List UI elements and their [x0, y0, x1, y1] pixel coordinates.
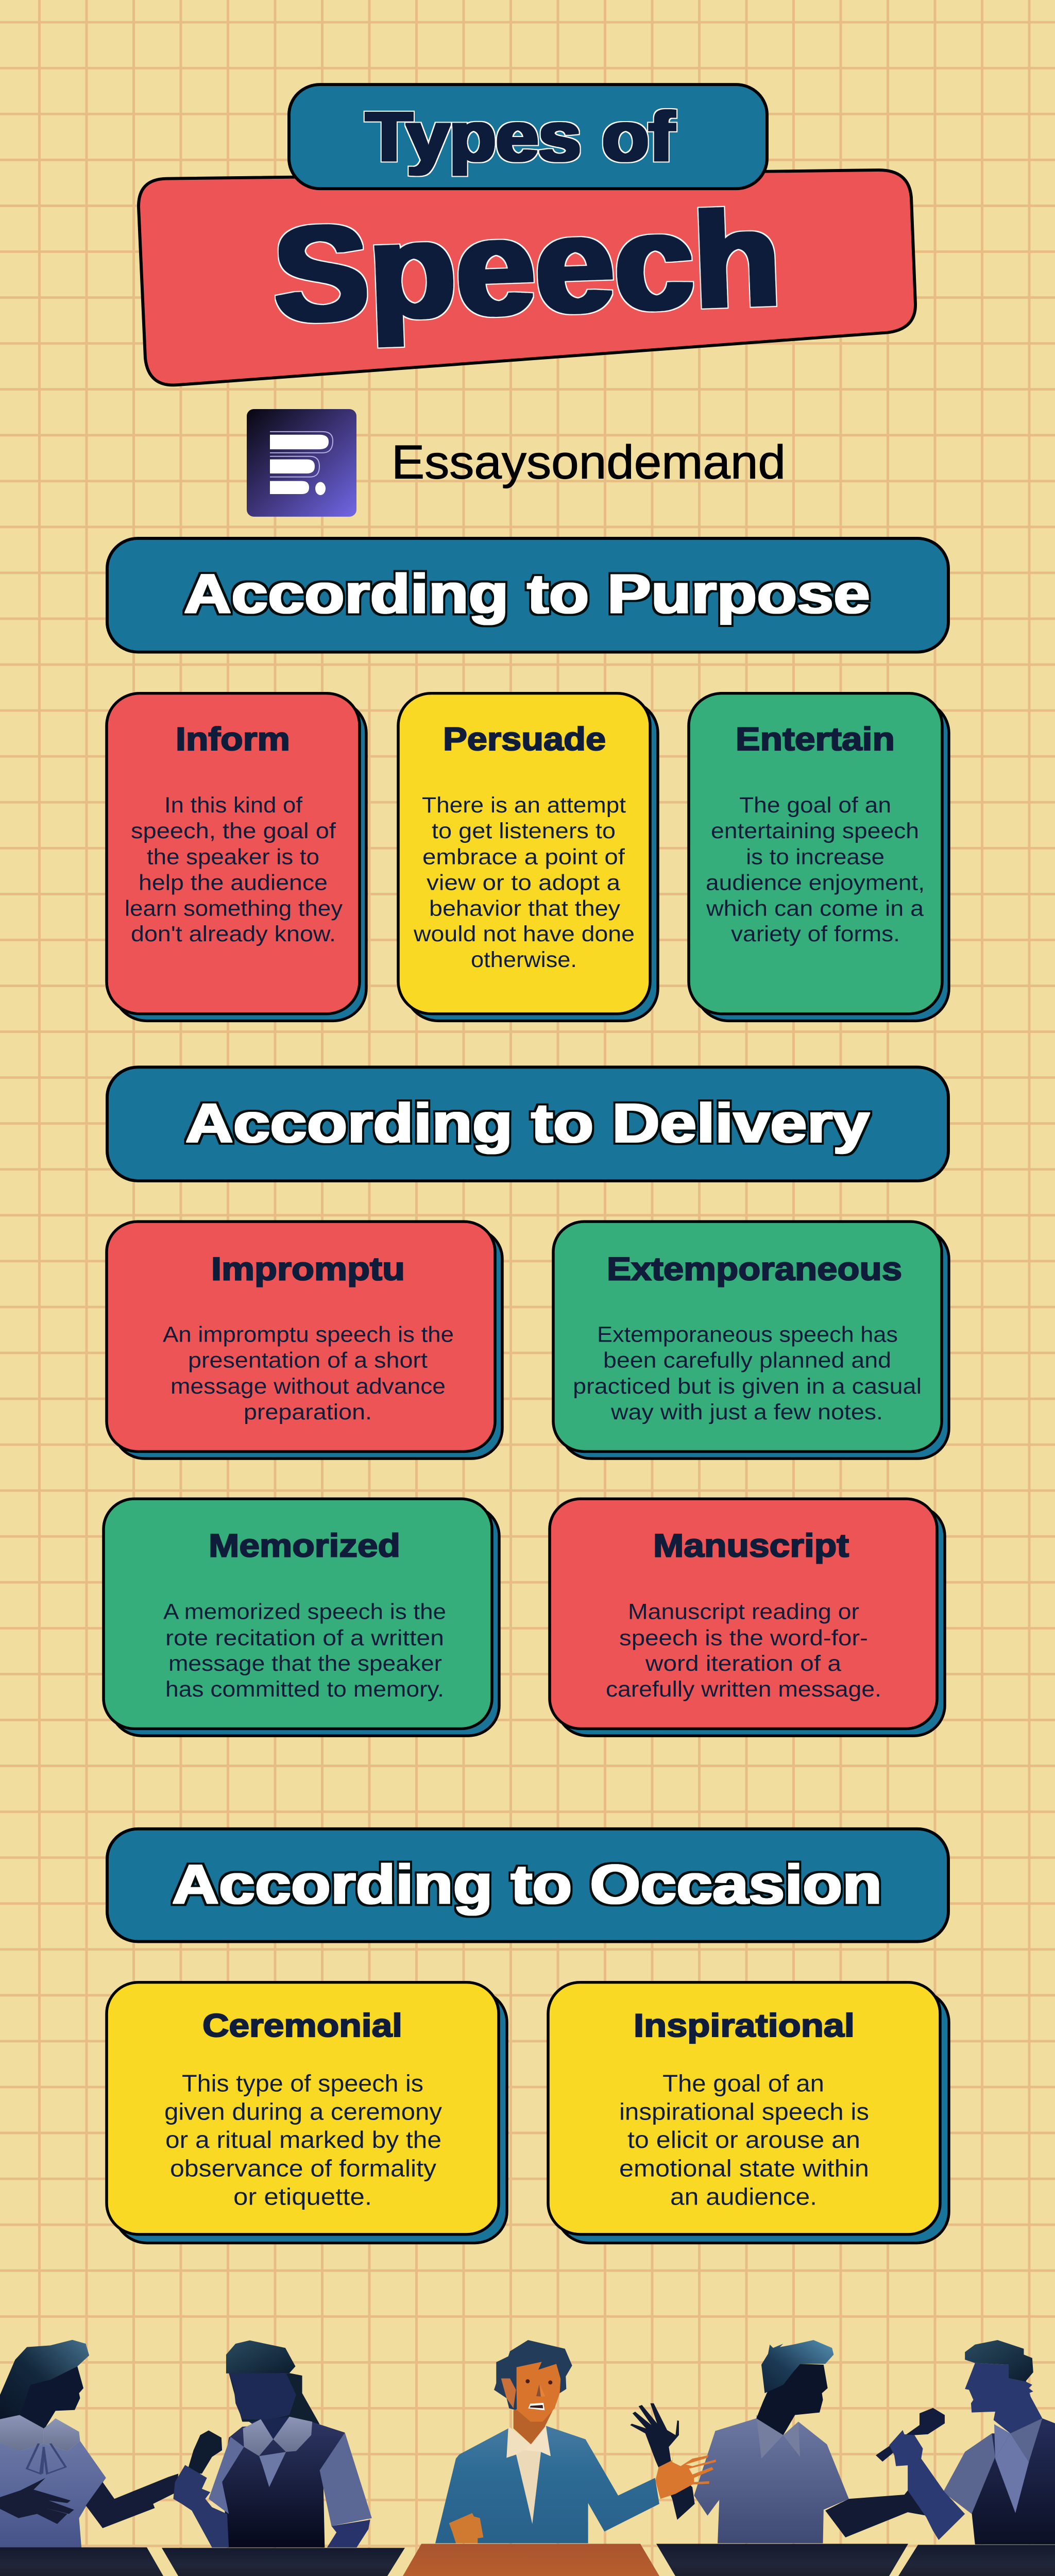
card: Entertain: which can come in a — [706, 896, 924, 921]
card: Persuade: view or to adopt a — [427, 871, 621, 895]
card: Inspirational: inspirational speech is — [619, 2098, 869, 2125]
card: Manuscript — [550, 1499, 945, 1736]
card: Inform: In this kind of — [164, 793, 303, 818]
card: Persuade: would not have done — [413, 922, 635, 946]
card: Impromptu — [107, 1222, 502, 1459]
card: Inspirational: The goal of an — [662, 2070, 824, 2096]
card: Impromptu: An impromptu speech is the — [163, 1323, 454, 1347]
card: Extemporaneous — [553, 1222, 949, 1459]
card: Extemporaneous: way with just a few notes. — [610, 1400, 883, 1425]
card: Ceremonial: given during a ceremony — [164, 2098, 443, 2125]
section heading: According to Delivery — [107, 1067, 948, 1181]
card: Inspirational: Inspirational — [634, 2007, 855, 2044]
card: Persuade — [398, 693, 658, 1021]
section heading: According to Occasion: According to Occasion — [172, 1854, 882, 1916]
card: Memorized: Memorized — [209, 1527, 400, 1564]
card: Inspirational — [548, 1982, 949, 2243]
card: Impromptu: preparation. — [244, 1400, 372, 1425]
speaker's hand — [655, 2449, 716, 2499]
card: Manuscript: Manuscript reading or — [628, 1600, 859, 1624]
speaker — [435, 2340, 659, 2543]
card: Extemporaneous: Extemporaneous speech has — [597, 1323, 898, 1347]
card: Entertain: audience enjoyment, — [706, 871, 925, 895]
title block — [139, 84, 915, 385]
card: Entertain: is to increase — [746, 845, 884, 870]
card: Impromptu: presentation of a short — [188, 1348, 428, 1372]
card: Entertain: entertaining speech — [711, 819, 919, 843]
card: Entertain: variety of forms. — [731, 922, 900, 946]
card: Ceremonial — [107, 1982, 507, 2243]
card: Entertain: Entertain — [736, 721, 895, 757]
card: Memorized: rote recitation of a written — [165, 1626, 444, 1650]
card: Memorized: has committed to memory. — [165, 1677, 444, 1702]
teal title pill — [289, 84, 767, 189]
card: Persuade: otherwise. — [471, 947, 577, 972]
card: Inform: learn something they — [125, 896, 343, 921]
card: Inform: the speaker is to — [147, 845, 319, 870]
card: Ceremonial: This type of speech is — [182, 2070, 423, 2096]
brand name: Essaysondemand — [392, 436, 786, 488]
card: Inform: Inform — [176, 721, 290, 757]
reporter: man centre-right — [630, 2340, 948, 2543]
card: Extemporaneous: practiced but is given in a casual — [573, 1375, 922, 1399]
card: Memorized: message that the speaker — [168, 1652, 442, 1676]
card: Ceremonial: or a ritual marked by the — [165, 2126, 441, 2153]
card: Impromptu: message without advance — [171, 1375, 446, 1399]
logo — [247, 409, 786, 517]
card: Entertain: The goal of an — [739, 793, 891, 818]
section heading: According to Purpose — [107, 538, 948, 652]
card: Persuade: There is an attempt — [422, 793, 626, 818]
reporter: woman left — [0, 2340, 178, 2548]
card: Persuade: embrace a point of — [422, 845, 625, 870]
card: Inform: help the audience — [139, 871, 328, 895]
card: Manuscript: Manuscript — [653, 1527, 849, 1564]
card: Extemporaneous: been carefully planned and — [603, 1348, 891, 1372]
card: Extemporaneous: Extemporaneous — [607, 1250, 902, 1287]
card: Ceremonial: observance of formality — [170, 2155, 437, 2181]
card: Inspirational: to elicit or arouse an — [627, 2126, 860, 2153]
card: Ceremonial: or etiquette. — [233, 2183, 372, 2210]
red title banner — [139, 170, 915, 385]
desks — [0, 2544, 1055, 2576]
card: Persuade: Persuade — [443, 721, 606, 757]
card: Manuscript: word iteration of a — [645, 1652, 842, 1676]
card: Entertain — [689, 693, 949, 1021]
card: Inform: speech, the goal of — [131, 819, 336, 843]
card: Inspirational: an audience. — [670, 2183, 817, 2210]
icon: logo badge — [247, 409, 356, 517]
card: Persuade: to get listeners to — [432, 819, 616, 843]
title line: Types of: Types of — [366, 98, 675, 175]
card: Inform: don't already know. — [131, 922, 336, 946]
section heading: According to Purpose: According to Purpose — [184, 564, 870, 625]
card: Memorized — [104, 1499, 499, 1736]
card: Manuscript: carefully written message. — [606, 1677, 881, 1702]
card: Inspirational: emotional state within — [619, 2155, 869, 2181]
card: Impromptu: Impromptu — [211, 1250, 405, 1287]
section heading: According to Delivery: According to Delivery — [185, 1093, 870, 1155]
reporter: man right — [876, 2340, 1055, 2545]
card: Persuade: behavior that they — [429, 896, 620, 921]
section heading: According to Occasion — [107, 1829, 948, 1942]
reporter: woman centre-left — [173, 2341, 372, 2548]
card: Memorized: A memorized speech is the — [163, 1600, 446, 1624]
card: Manuscript: speech is the word-for- — [619, 1626, 868, 1650]
title line: Speech: Speech — [271, 183, 783, 351]
card: Ceremonial: Ceremonial — [202, 2007, 402, 2044]
illustration: speaker and reporters — [0, 2340, 1055, 2576]
card: Inform — [107, 693, 366, 1021]
